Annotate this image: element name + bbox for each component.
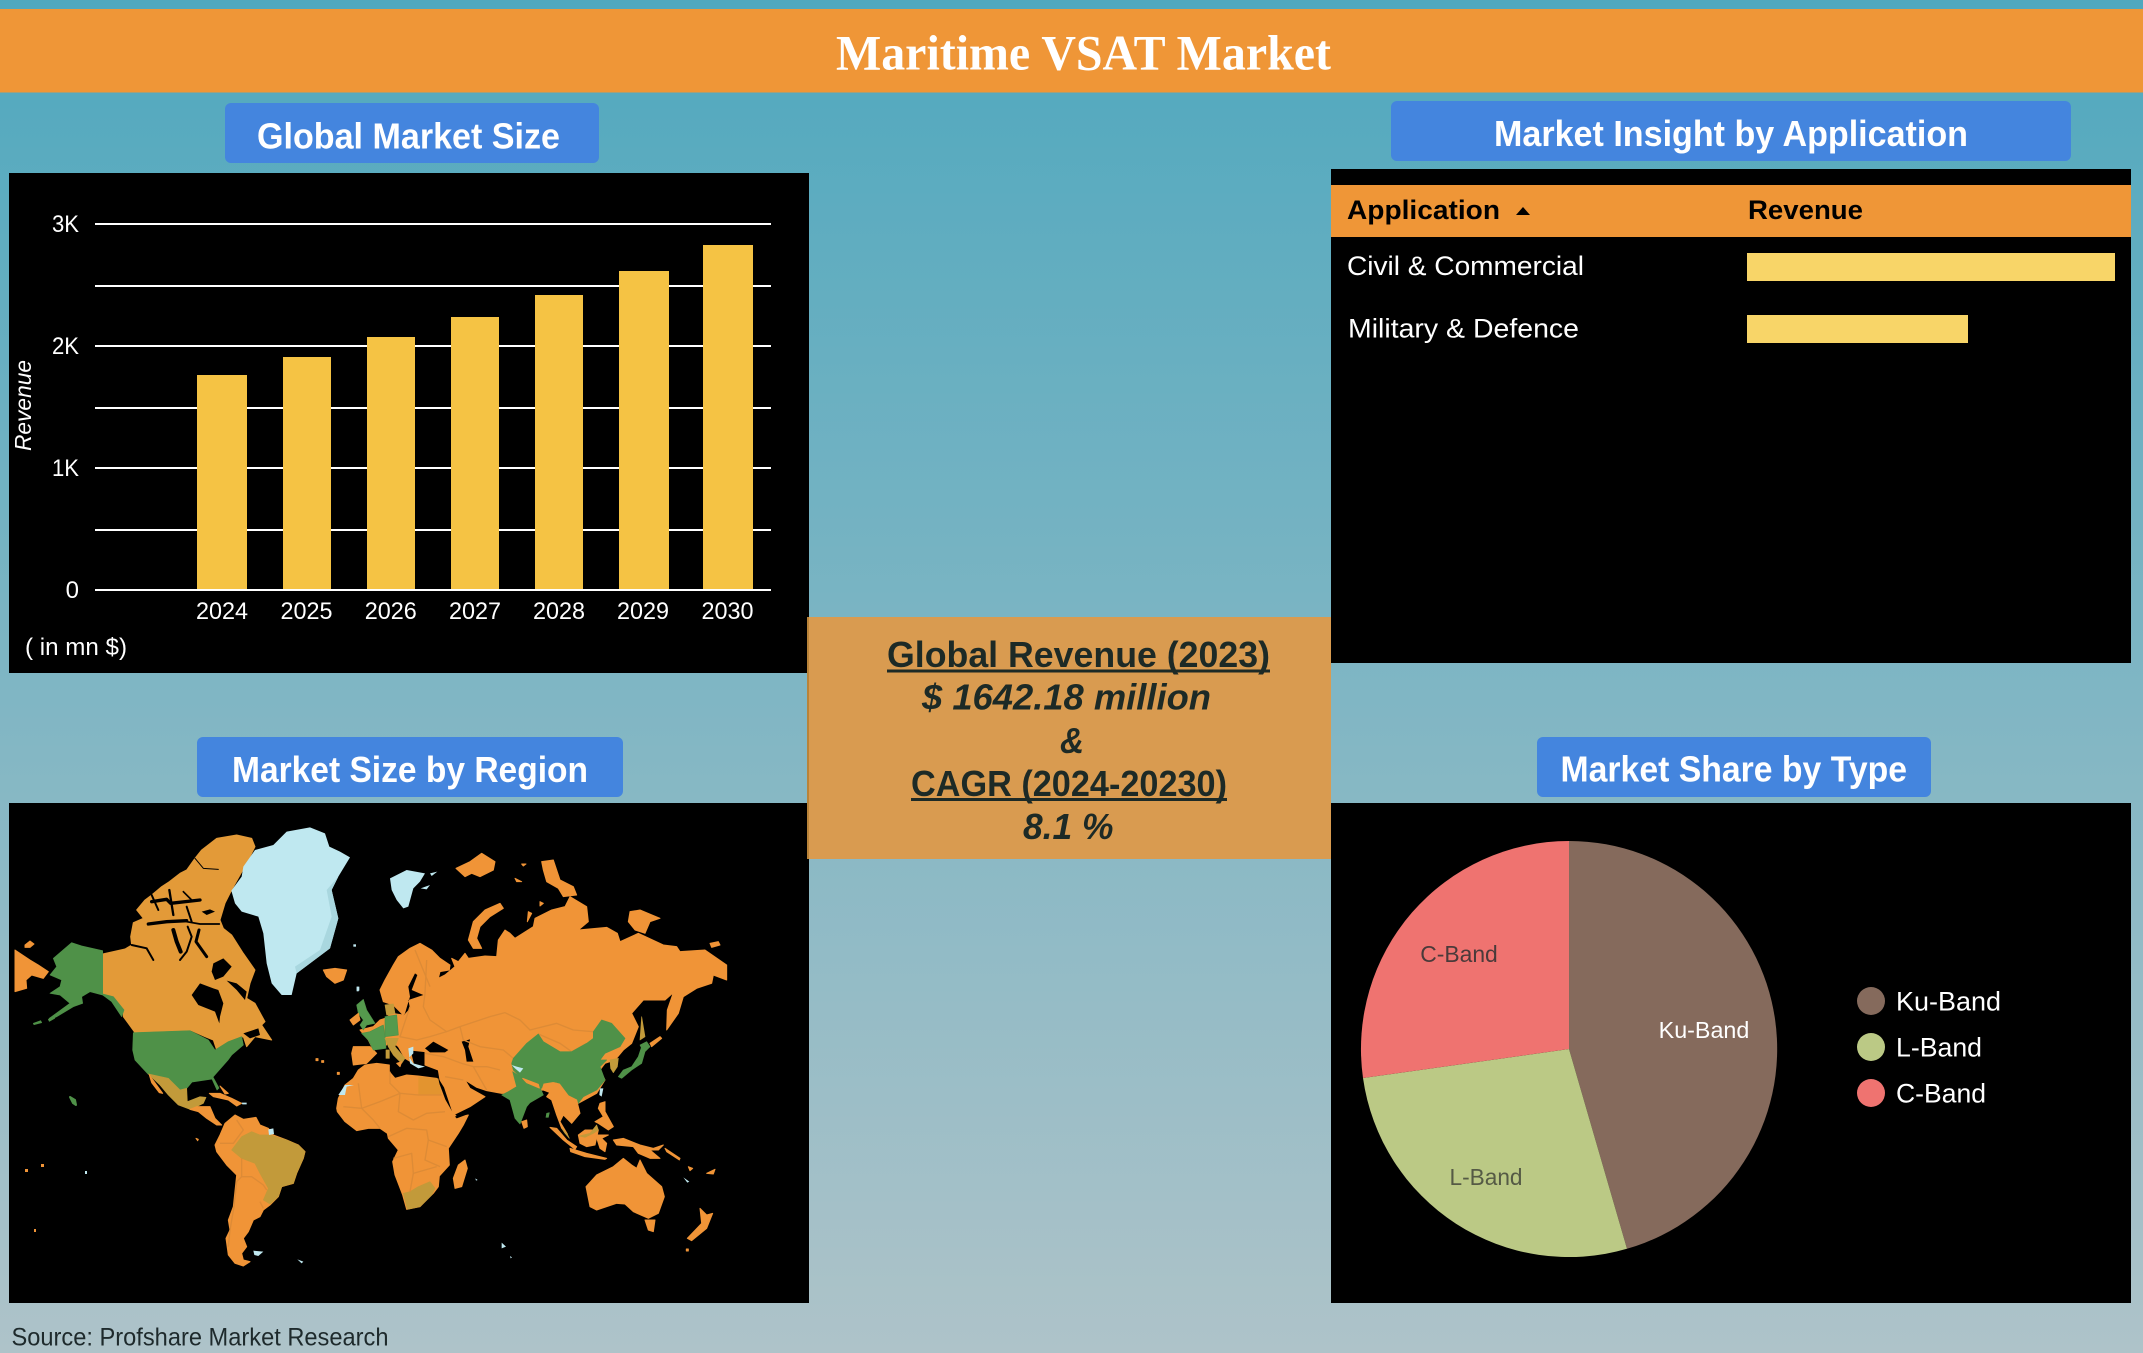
map: small pacific islands — [25, 1097, 87, 1232]
row: civil and commercial — [1347, 251, 2115, 281]
y axis labels — [52, 211, 79, 604]
callout: global revenue and CAGR: CAGR (2024-20230) — [911, 763, 1227, 804]
x axis labels: 2026 — [365, 598, 417, 625]
source note: Source: Profshare Market Research — [12, 1324, 388, 1352]
panel: application table — [1331, 169, 2131, 663]
map: africa and oceania — [337, 1063, 715, 1258]
new guinea — [613, 1138, 663, 1158]
callout: global revenue and CAGR — [807, 617, 1331, 859]
y axis labels: 1K — [52, 455, 79, 482]
callout: global revenue and CAGR: 8.1 % — [1023, 806, 1114, 847]
y axis labels: 0 — [66, 577, 79, 604]
legend — [1857, 987, 2001, 1109]
pie: C-Band — [1420, 941, 1498, 967]
x axis labels: 2024 — [196, 598, 248, 625]
x axis labels: 2027 — [449, 598, 501, 625]
y axis labels: 3K — [52, 211, 79, 238]
alaska — [49, 943, 124, 1020]
x axis labels: 2029 — [617, 598, 669, 625]
panel: world map — [9, 803, 809, 1303]
southeast asia mainland — [547, 1083, 580, 1134]
row: civil and commercial: Civil & Commercial — [1347, 251, 1584, 281]
india — [502, 1072, 543, 1124]
contiguous united states — [133, 1031, 243, 1090]
table header: Application — [1347, 195, 1500, 225]
row: military and defence: Military & Defence — [1348, 314, 1579, 344]
sumatra and java — [550, 1127, 577, 1149]
x axis labels: 2028 — [533, 598, 585, 625]
heading: Market Size by Region: Market Size by Region — [232, 749, 588, 790]
map: north america and greenland — [15, 827, 359, 1090]
greenland — [231, 827, 350, 995]
new zealand — [687, 1208, 713, 1241]
row: military and defence — [1348, 314, 1968, 344]
axis title: Revenue: Revenue — [10, 360, 36, 451]
callout: global revenue and CAGR: & — [1060, 720, 1084, 761]
china — [512, 1020, 625, 1103]
borneo — [578, 1130, 598, 1147]
y axis labels: 2K — [52, 333, 79, 360]
unit note: ( in mn $) — [25, 634, 127, 661]
map: eurasia — [350, 853, 727, 1134]
panel: market share pie chart — [1331, 803, 2131, 1303]
heading: Market Insight by Application — [1391, 101, 2071, 161]
x axis labels: 2030 — [702, 598, 754, 625]
title banner — [0, 9, 2143, 92]
legend: L-Band — [1896, 1033, 1982, 1063]
western europe — [352, 1047, 377, 1065]
table header — [1331, 185, 2131, 237]
x axis labels: 2025 — [280, 598, 332, 625]
panel: global market size bar chart — [9, 173, 809, 673]
heading: Market Share by Type — [1537, 737, 1931, 797]
japan and korea — [618, 1047, 650, 1078]
heading: Market Size by Region — [197, 737, 623, 797]
map: latin america — [148, 1074, 305, 1266]
pie: Ku-Band — [1659, 1017, 1749, 1043]
callout: global revenue and CAGR: Global Revenue (2023) — [887, 634, 1270, 675]
legend: Ku-Band — [1896, 987, 2001, 1017]
pie — [1361, 841, 1777, 1257]
table header: Revenue — [1748, 195, 1863, 225]
heading: Global Market Size: Global Market Size — [257, 116, 560, 157]
callout: global revenue and CAGR: $ 1642.18 million — [921, 676, 1211, 718]
pie: L-Band — [1450, 1164, 1522, 1190]
legend: C-Band — [1896, 1079, 1986, 1109]
title banner: Maritime VSAT Market — [836, 24, 1331, 80]
bars — [197, 245, 753, 589]
sulawesi and philippines — [597, 1135, 608, 1152]
heading: Market Insight by Application: Market Insight by Application — [1494, 113, 1968, 154]
australia — [586, 1158, 664, 1218]
x axis labels — [196, 598, 754, 625]
heading: Market Share by Type: Market Share by Type — [1560, 749, 1907, 790]
heading: Global Market Size — [225, 103, 599, 163]
